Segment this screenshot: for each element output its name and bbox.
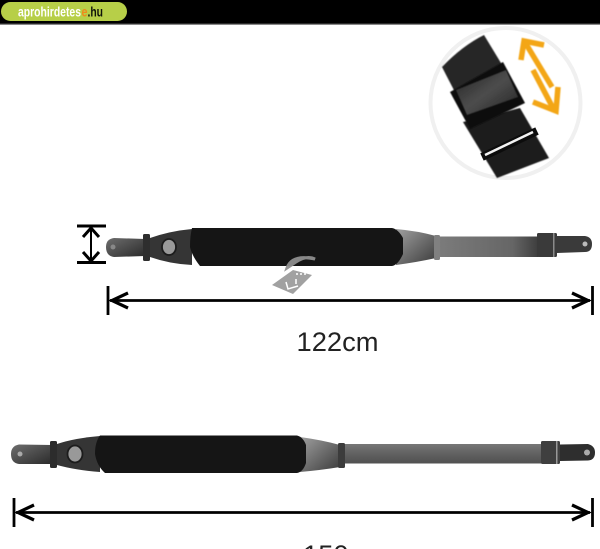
logo: aprohirdetes.hu: aprohirdetes <box>18 4 81 20</box>
padded shoulder section <box>95 436 306 473</box>
logo: aprohirdetes.hu <box>1 2 127 21</box>
left leather wing <box>57 436 100 472</box>
buckle <box>450 62 525 129</box>
right end tab <box>560 444 595 461</box>
badge <box>162 239 176 255</box>
logo: aprohirdetes.hu: e <box>82 4 88 20</box>
metal bar <box>482 131 537 157</box>
width dimension marker <box>77 226 106 262</box>
left buckle <box>143 234 150 261</box>
right end tab <box>557 236 592 253</box>
left end tab <box>11 444 52 464</box>
badge <box>68 446 82 462</box>
length arrow: 150cm <box>14 498 592 527</box>
header bar <box>0 0 600 25</box>
watermark tag icon <box>272 258 315 294</box>
right leather wing <box>300 437 340 472</box>
length arrow: 122cm <box>108 286 592 315</box>
left leather wing <box>150 229 192 265</box>
lower strap <box>463 108 549 178</box>
logo: aprohirdetes.hu: .hu <box>88 4 103 20</box>
inset: adjuster buckle detail <box>430 28 580 178</box>
strap: long 150cm <box>11 436 595 473</box>
padded shoulder section <box>190 228 403 266</box>
webbing <box>340 444 543 464</box>
upper webbing <box>442 35 504 98</box>
label: 122cm: 122cm <box>296 327 378 357</box>
left end tab <box>106 238 145 257</box>
right keeper <box>434 235 440 260</box>
left buckle <box>50 441 57 468</box>
icon: orange double arrow <box>521 41 558 111</box>
webbing <box>436 236 538 257</box>
right leather wing <box>396 229 436 265</box>
right keeper <box>338 443 345 468</box>
strap: short 122cm <box>106 228 592 266</box>
